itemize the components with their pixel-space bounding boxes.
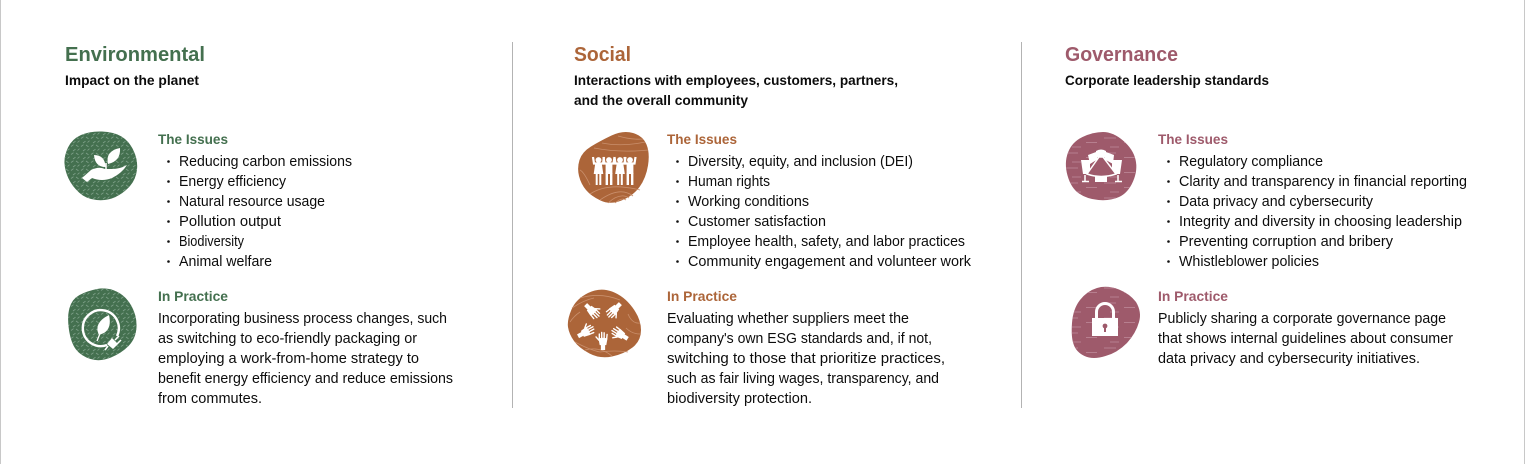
paragraph: employing a work-from-home strategy to (158, 351, 419, 367)
bullet list: Biodiversity (179, 234, 245, 250)
subheading: governance: Corporate leadership standards (1065, 72, 1269, 88)
label: the issues: The Issues (1158, 131, 1228, 147)
block: in practice (1158, 288, 1453, 367)
bullet list: Reducing carbon emissions (179, 154, 352, 170)
bullet list: Customer satisfaction (688, 214, 826, 230)
block: in practice (667, 288, 945, 407)
icon: joined hands (568, 290, 641, 357)
paragraph (1158, 311, 1453, 367)
label: in practice: In Practice (667, 288, 737, 304)
paragraph: data privacy and cybersecurity initiatives. (1158, 351, 1420, 367)
bullet list: Data privacy and cybersecurity (1179, 194, 1374, 210)
bullet list (1167, 154, 1467, 270)
bullet list: Diversity, equity, and inclusion (DEI) (688, 154, 913, 170)
bullet list: Clarity and transparency in financial reporting (1179, 174, 1467, 190)
bullet list: Human rights (688, 174, 770, 190)
block: the issues (667, 131, 972, 270)
bullet list: Animal welfare (179, 254, 272, 270)
subheading: social: and the overall community (574, 92, 748, 108)
block: in practice (158, 288, 453, 407)
panel: environmental (64, 44, 453, 407)
heading: environmental: Environmental (65, 44, 205, 66)
heading: social: Social (574, 44, 631, 66)
paragraph: Publicly sharing a corporate governance page (1158, 311, 1446, 327)
bullet list: Energy efficiency (179, 174, 287, 190)
paragraph (667, 311, 945, 407)
bullet list: Preventing corruption and bribery (1179, 234, 1394, 250)
paragraph: switching to those that prioritize practices, (667, 351, 945, 367)
paragraph: Incorporating business process changes, such (158, 311, 447, 327)
bullet list: Natural resource usage (179, 194, 325, 210)
icon: hand holding plant (64, 131, 137, 200)
icon: group of people (578, 132, 649, 203)
bullet list: Regulatory compliance (1179, 154, 1323, 170)
label: in practice: In Practice (1158, 288, 1228, 304)
bullet list (167, 154, 352, 270)
divider: right (1021, 42, 1022, 408)
label: the issues: The Issues (667, 131, 737, 147)
divider: left (512, 42, 513, 408)
label: in practice: In Practice (158, 288, 228, 304)
bullet list: Integrity and diversity in choosing leadership (1179, 214, 1462, 230)
block: the issues (1158, 131, 1467, 270)
paragraph: that shows internal guidelines about consumer (1158, 331, 1453, 347)
icon: boardroom table (1066, 132, 1136, 200)
bullet list: Whistleblower policies (1179, 254, 1319, 270)
subheading: social (574, 72, 898, 108)
paragraph: Evaluating whether suppliers meet the (667, 311, 909, 327)
bullet list (676, 154, 972, 270)
paragraph (158, 311, 453, 407)
block: the issues (158, 131, 352, 270)
icon: leaf plug (68, 288, 137, 360)
panel: governance (1065, 44, 1467, 367)
paragraph: benefit energy efficiency and reduce emissions (158, 371, 453, 387)
subheading: social: Interactions with employees, customers, partners, (574, 72, 898, 88)
icon: padlock (1072, 287, 1140, 358)
paragraph: as switching to eco-friendly packaging or (158, 331, 417, 347)
paragraph: such as fair living wages, transparency, and (667, 371, 939, 387)
label: the issues: The Issues (158, 131, 228, 147)
heading: governance: Governance (1065, 44, 1178, 66)
bullet list: Employee health, safety, and labor practices (688, 234, 965, 250)
bullet list: Pollution output (179, 214, 281, 230)
bullet list: Working conditions (688, 194, 809, 210)
paragraph: from commutes. (158, 391, 262, 407)
bullet list: Community engagement and volunteer work (688, 254, 972, 270)
paragraph: company's own ESG standards and, if not, (667, 331, 932, 347)
paragraph: biodiversity protection. (667, 391, 812, 407)
subheading: environmental: Impact on the planet (65, 72, 199, 88)
panel: social (568, 44, 972, 407)
